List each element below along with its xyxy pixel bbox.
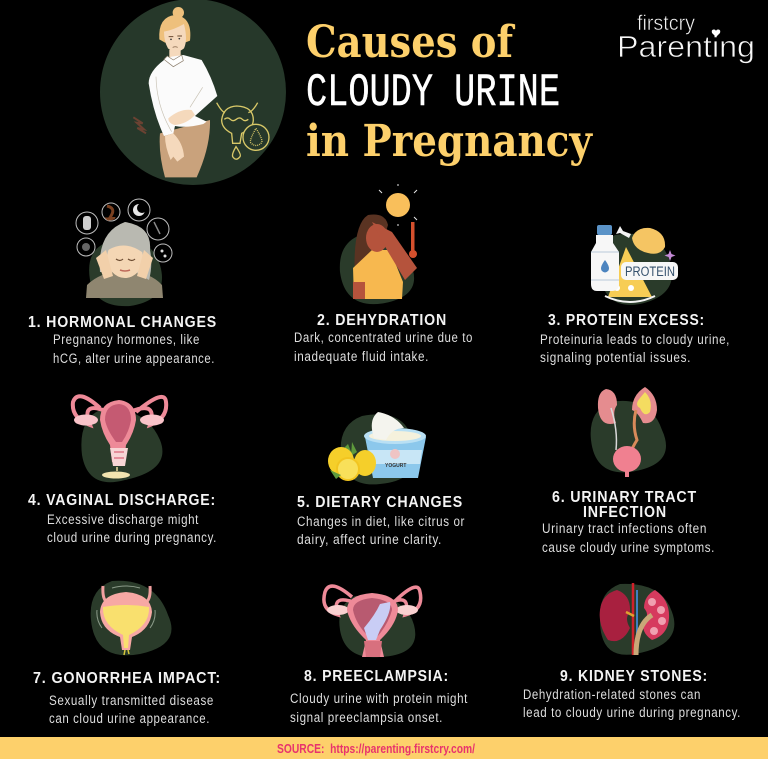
description bbox=[53, 332, 215, 366]
heading: 9. KIDNEY STONES: bbox=[560, 668, 708, 685]
logo: firstcry parenting bbox=[617, 12, 755, 64]
icon: protein foods bbox=[591, 225, 678, 305]
heading: 6. URINARY TRACT bbox=[552, 489, 697, 506]
source bar: SOURCE: https://parenting.firstcry.com/ bbox=[277, 742, 475, 756]
description: dairy, affect urine clarity. bbox=[297, 532, 442, 547]
title bbox=[306, 17, 593, 167]
description bbox=[523, 687, 741, 720]
heading: 2. DEHYDRATION bbox=[317, 312, 447, 329]
panel 2: dehydration bbox=[294, 184, 473, 364]
description: Sexually transmitted disease bbox=[49, 693, 214, 708]
icon: woman with headache and hormone bubbles bbox=[76, 199, 172, 306]
heading: 3. PROTEIN EXCESS: bbox=[548, 312, 705, 329]
description: Urinary tract infections often bbox=[542, 521, 707, 536]
logo: firstcry parenting: Parenting bbox=[617, 29, 755, 64]
description: hCG, alter urine appearance. bbox=[53, 351, 215, 366]
icon: kidneys and bladder bbox=[591, 387, 666, 477]
description: signal preeclampsia onset. bbox=[290, 710, 443, 725]
panel 8: preeclampsia bbox=[290, 586, 468, 725]
description: signaling potential issues. bbox=[540, 350, 691, 365]
icon: bladder with yellow fluid bbox=[91, 581, 172, 655]
description bbox=[297, 514, 465, 547]
description: Dark, concentrated urine due to bbox=[294, 330, 473, 345]
panel 9: kidney stones bbox=[523, 583, 741, 720]
hero illustration: woman with bladder icon bbox=[100, 0, 286, 185]
description: Changes in diet, like citrus or bbox=[297, 514, 465, 529]
heading: 7. GONORRHEA IMPACT: bbox=[33, 670, 221, 687]
panel 6: urinary tract infection bbox=[542, 387, 715, 555]
icon: uterus with lining bbox=[324, 586, 421, 657]
description bbox=[294, 330, 473, 364]
description bbox=[47, 512, 217, 545]
icon: yogurt and lemons: YOGURT bbox=[385, 463, 406, 469]
source bar bbox=[0, 737, 768, 759]
description bbox=[540, 332, 730, 365]
description: cloud urine during pregnancy. bbox=[47, 530, 217, 545]
title: in Pregnancy bbox=[306, 116, 593, 167]
title: Causes of bbox=[306, 17, 516, 68]
icon: woman in sun with thermometer bbox=[340, 184, 417, 304]
description: Cloudy urine with protein might bbox=[290, 691, 468, 706]
description bbox=[49, 693, 214, 726]
logo: firstcry parenting: firstcry bbox=[637, 12, 695, 35]
icon: protein foods: PROTEIN bbox=[625, 264, 675, 279]
description bbox=[290, 691, 468, 725]
icon: uterus with discharge bbox=[73, 396, 166, 482]
panel 3: protein excess bbox=[540, 225, 730, 365]
panel 4: vaginal discharge bbox=[28, 396, 217, 545]
description: Pregnancy hormones, like bbox=[53, 332, 200, 347]
description: can cloud urine appearance. bbox=[49, 711, 210, 726]
description: cause cloudy urine symptoms. bbox=[542, 540, 715, 555]
heading: 8. PREECLAMPSIA: bbox=[304, 668, 449, 685]
description: Dehydration-related stones can bbox=[523, 687, 701, 702]
icon: kidneys and stones bbox=[600, 583, 674, 655]
heading: 5. DIETARY CHANGES bbox=[297, 494, 463, 511]
heading: 4. VAGINAL DISCHARGE: bbox=[28, 492, 216, 509]
description: Excessive discharge might bbox=[47, 512, 199, 527]
panel 1: hormonal changes bbox=[28, 199, 217, 366]
title: CLOUDY URINE bbox=[306, 67, 560, 119]
description: Proteinuria leads to cloudy urine, bbox=[540, 332, 730, 347]
panel 5: dietary changes bbox=[297, 412, 465, 547]
heading: INFECTION bbox=[583, 504, 667, 521]
heading bbox=[552, 489, 697, 521]
description bbox=[542, 521, 715, 555]
heading: 1. HORMONAL CHANGES bbox=[28, 314, 217, 331]
description: inadequate fluid intake. bbox=[294, 349, 429, 364]
panel 7: gonorrhea impact bbox=[33, 581, 221, 726]
icon: yogurt and lemons bbox=[328, 412, 426, 484]
